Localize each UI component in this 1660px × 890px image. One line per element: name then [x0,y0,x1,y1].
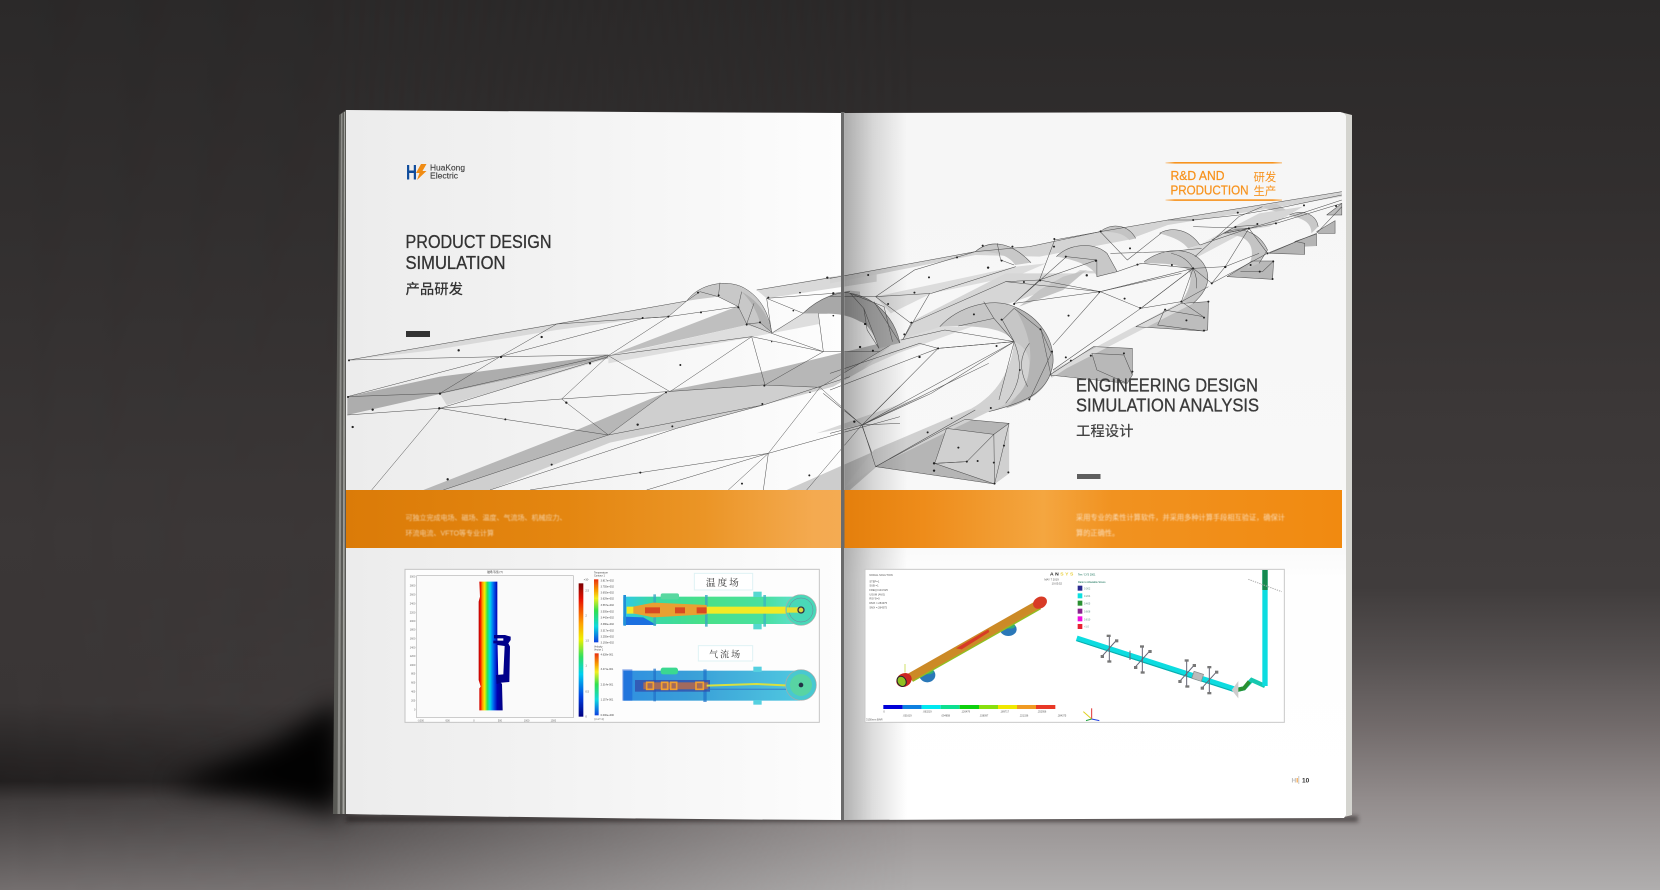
stress ratio legend: 0.810 [1084,618,1091,621]
supports [876,419,1009,484]
colour bar 2: temperature: 3.505e+002 [601,610,614,613]
label: temperature field [694,573,753,590]
stress ratio legend: 0.002 [1084,588,1091,591]
contour plot: 500 [498,719,503,722]
heading: engineering design simulation analysis: SIMULATION ANALYSIS [1076,396,1259,416]
brochure spread [333,110,1352,820]
stress readout text: USUM (AVG) [869,592,885,596]
heading accent bar left [406,331,430,337]
wireframe pipe illustration [347,192,1342,490]
orange band left and right [346,490,1342,548]
contour plot: 1400 [410,646,416,649]
colour bar 3: velocity [594,646,614,721]
colour bar 2: temperature: Contour 1 [594,575,606,578]
contour plot: 200 [411,699,416,702]
page number: 10 [1302,778,1310,784]
stress ratio legend: 0.608 [1084,610,1091,613]
colour bar 3: velocity: 4.628e-001 [601,653,614,656]
stress readout text: 3150mm BAR [866,718,883,722]
panel: left page [346,110,843,820]
stress ratio legend: 0.405 [1084,603,1091,606]
logo: HuaKong Electric [406,162,465,184]
contour scale bar: .094858 [941,714,951,717]
colour bar 3: velocity: Vector 1 [594,649,604,652]
contour plot: 3000 [410,576,416,579]
colour bar 2: temperature: 3.629e+002 [601,598,614,601]
label: airflow field: 气流场 [709,648,742,661]
contour plot: 1000 [524,719,530,722]
heading: product design simulation: SIMULATION [406,253,506,273]
contour plot: 1600 [410,638,416,641]
contour plot: 2600 [410,594,416,597]
left mesh nodes [347,276,834,485]
stress readout text [866,573,1063,722]
colour bar 2: temperature: 3.755e+002 [601,585,614,588]
heading: engineering design simulation analysis: ENGINEERING DESIGN [1076,376,1258,396]
stress readout text: RSYS=0 [869,597,880,601]
contour scale bar: .252956 [1037,710,1047,713]
left page stacked edge [333,110,346,814]
contour plot: 1800 [410,629,416,632]
stress readout text: MAY 7 2019 [1044,577,1059,581]
airflow pipe [622,667,816,705]
contour plot: -1000 [417,719,424,722]
band text right [1076,513,1285,538]
left page mesh [347,273,900,490]
axis triad [1083,708,1099,721]
stress readout text: FREQ=104.525 [869,588,888,592]
stress ratio legend: Ratio to Allowable Stress [1078,581,1106,584]
contour plot: 400 [411,690,416,693]
panel: right page [843,112,1346,820]
piping stress model [1077,570,1282,698]
colour bar 2: temperature: 3.817e+002 [601,579,614,582]
colour bar 3: velocity: [m s^-1] [595,718,604,721]
contour scale bar [883,705,1067,717]
figure: temperature and airflow field simulation [405,569,819,722]
contour plot: 0 [473,719,475,722]
figure: ANSYS stress and pipe analysis [865,569,1284,722]
colour bar 2: temperature: 3.317e+002 [601,629,614,632]
contour scale bar: .189717 [1000,710,1010,713]
pipe shadow bands [844,408,989,488]
colour bar 2: temperature [594,572,614,644]
section tag: R&D and production [1166,162,1282,201]
contour scale bar: .158097 [979,714,989,717]
stress readout text: STEP=1 [869,579,880,583]
contour plot: 1500 [551,719,557,722]
domes [803,292,900,348]
logo: HuaKong Electric: Electric [430,170,459,180]
contour scale bar: .284375 [1057,714,1067,717]
stress ratio legend: >1.0 [1084,626,1090,629]
contour scale bar: .221336 [1019,714,1029,717]
heading: engineering design simulation analysis [1076,376,1259,440]
contour plot [410,570,573,722]
colour bar 3: velocity: 1.157e-001 [601,699,614,702]
contour plot: 2800 [410,585,416,588]
band text right: 算的正确性。 [1076,528,1119,538]
stress ratio legend [1078,573,1106,629]
colour bar 2: temperature: 3.380e+002 [601,623,614,626]
crease shading right of the spine [845,113,907,820]
colour bar 1: 2.5 [585,588,590,592]
contour plot: 磁场 等值 (T) [487,570,503,574]
contour scale bar: .126479 [961,710,971,713]
contour plot: 800 [411,673,416,676]
contour scale bar: .031619 [903,714,912,717]
colour bar 1 [579,578,590,718]
colour bar 1: 1.5 [585,638,590,642]
stress readout text: DMX =.284375 [869,601,888,605]
colour bar 2: temperature: 3.567e+002 [601,604,614,607]
stress readout text: 10:05:52 [1052,582,1063,586]
contour scale bar: 0 [883,710,885,713]
colour bar 2: temperature: 3.193e+002 [601,641,614,644]
section tag: R&D and production: 生产 [1254,184,1276,198]
pipe model [894,594,1049,690]
label: temperature field: 温度场 [706,575,741,589]
left mesh lines [347,276,900,490]
contour plot: 0 [414,708,416,711]
contour plot: 2400 [410,602,416,605]
colour bar 1: 1 [585,664,587,668]
page number [1292,776,1310,784]
colour bar 2: temperature: 3.692e+002 [601,592,614,595]
section tag: R&D and production: R&D AND [1170,169,1224,183]
colour bar 3: velocity: Velocity [594,646,603,649]
heading: product design simulation: PRODUCT DESIGN [406,232,552,252]
contour plot: -500 [445,719,450,722]
contour plot: 1000 [410,664,416,667]
stress ratio legend: Tee / CYS 2001 [1078,573,1096,576]
colour bar 1: 2 [585,613,587,617]
right page stacked edge [1340,112,1352,818]
colour bar 1: 0.5 [585,689,590,693]
ANSYS wordmark: ANSYS [1050,571,1074,577]
heading accent bar right [1077,474,1100,479]
band text left: 可独立完成电场、磁场、温度、气流场、机械应力、 [406,513,566,522]
colour bar 3: velocity: 3.471e-001 [601,668,614,671]
colour bar 2: temperature: 3.255e+002 [601,635,614,638]
page number: HI [1292,778,1298,784]
heading: product design simulation: 产品研发 [406,281,463,298]
stress readout text: NODAL SOLUTION [869,573,893,577]
heading: engineering design simulation analysis: 工程设计 [1076,423,1134,440]
section tag: R&D and production: 研发 [1254,170,1276,184]
colour bar 3: velocity: 0.000e+000 [601,714,614,717]
right page mesh [803,192,1342,488]
right mesh lines [803,192,1342,484]
spine line [841,112,844,820]
band text right: 采用专业的柔性计算软件，并采用多种计算手段相互验证，确保计 [1076,513,1285,522]
contour plot: 2200 [410,611,416,614]
contour plot: 2000 [410,620,416,623]
band text left [406,513,566,538]
colour bar 3: velocity: 2.314e-001 [601,684,614,687]
logo: HuaKong Electric: HuaKong [430,162,465,172]
colour bar 2: temperature: 3.442e+002 [601,617,614,620]
stress readout text: SMX =.284375 [869,605,888,609]
stress ratio legend: 0.204 [1084,595,1091,598]
band text left: 环流电流、VFTO等专业计算 [406,528,494,538]
temperature pipe [623,592,816,629]
section tag: R&D and production: PRODUCTION [1170,184,1248,198]
far pipe bands [830,192,1342,283]
colour bar 1: 0 [585,714,587,718]
right mesh nodes [853,204,1337,485]
logo: HuaKong Electric: H [406,162,417,184]
label: airflow field [698,646,753,661]
contour plot: 600 [411,682,416,685]
contour scale bar: .063219 [923,710,932,713]
heading: product design simulation [406,232,552,298]
colour bar 1: ×10⁴ [584,578,590,582]
colour bar 2: temperature: Temperature [594,572,609,575]
stress readout text: SUB =1 [869,584,879,588]
contour plot: 1200 [410,655,416,658]
